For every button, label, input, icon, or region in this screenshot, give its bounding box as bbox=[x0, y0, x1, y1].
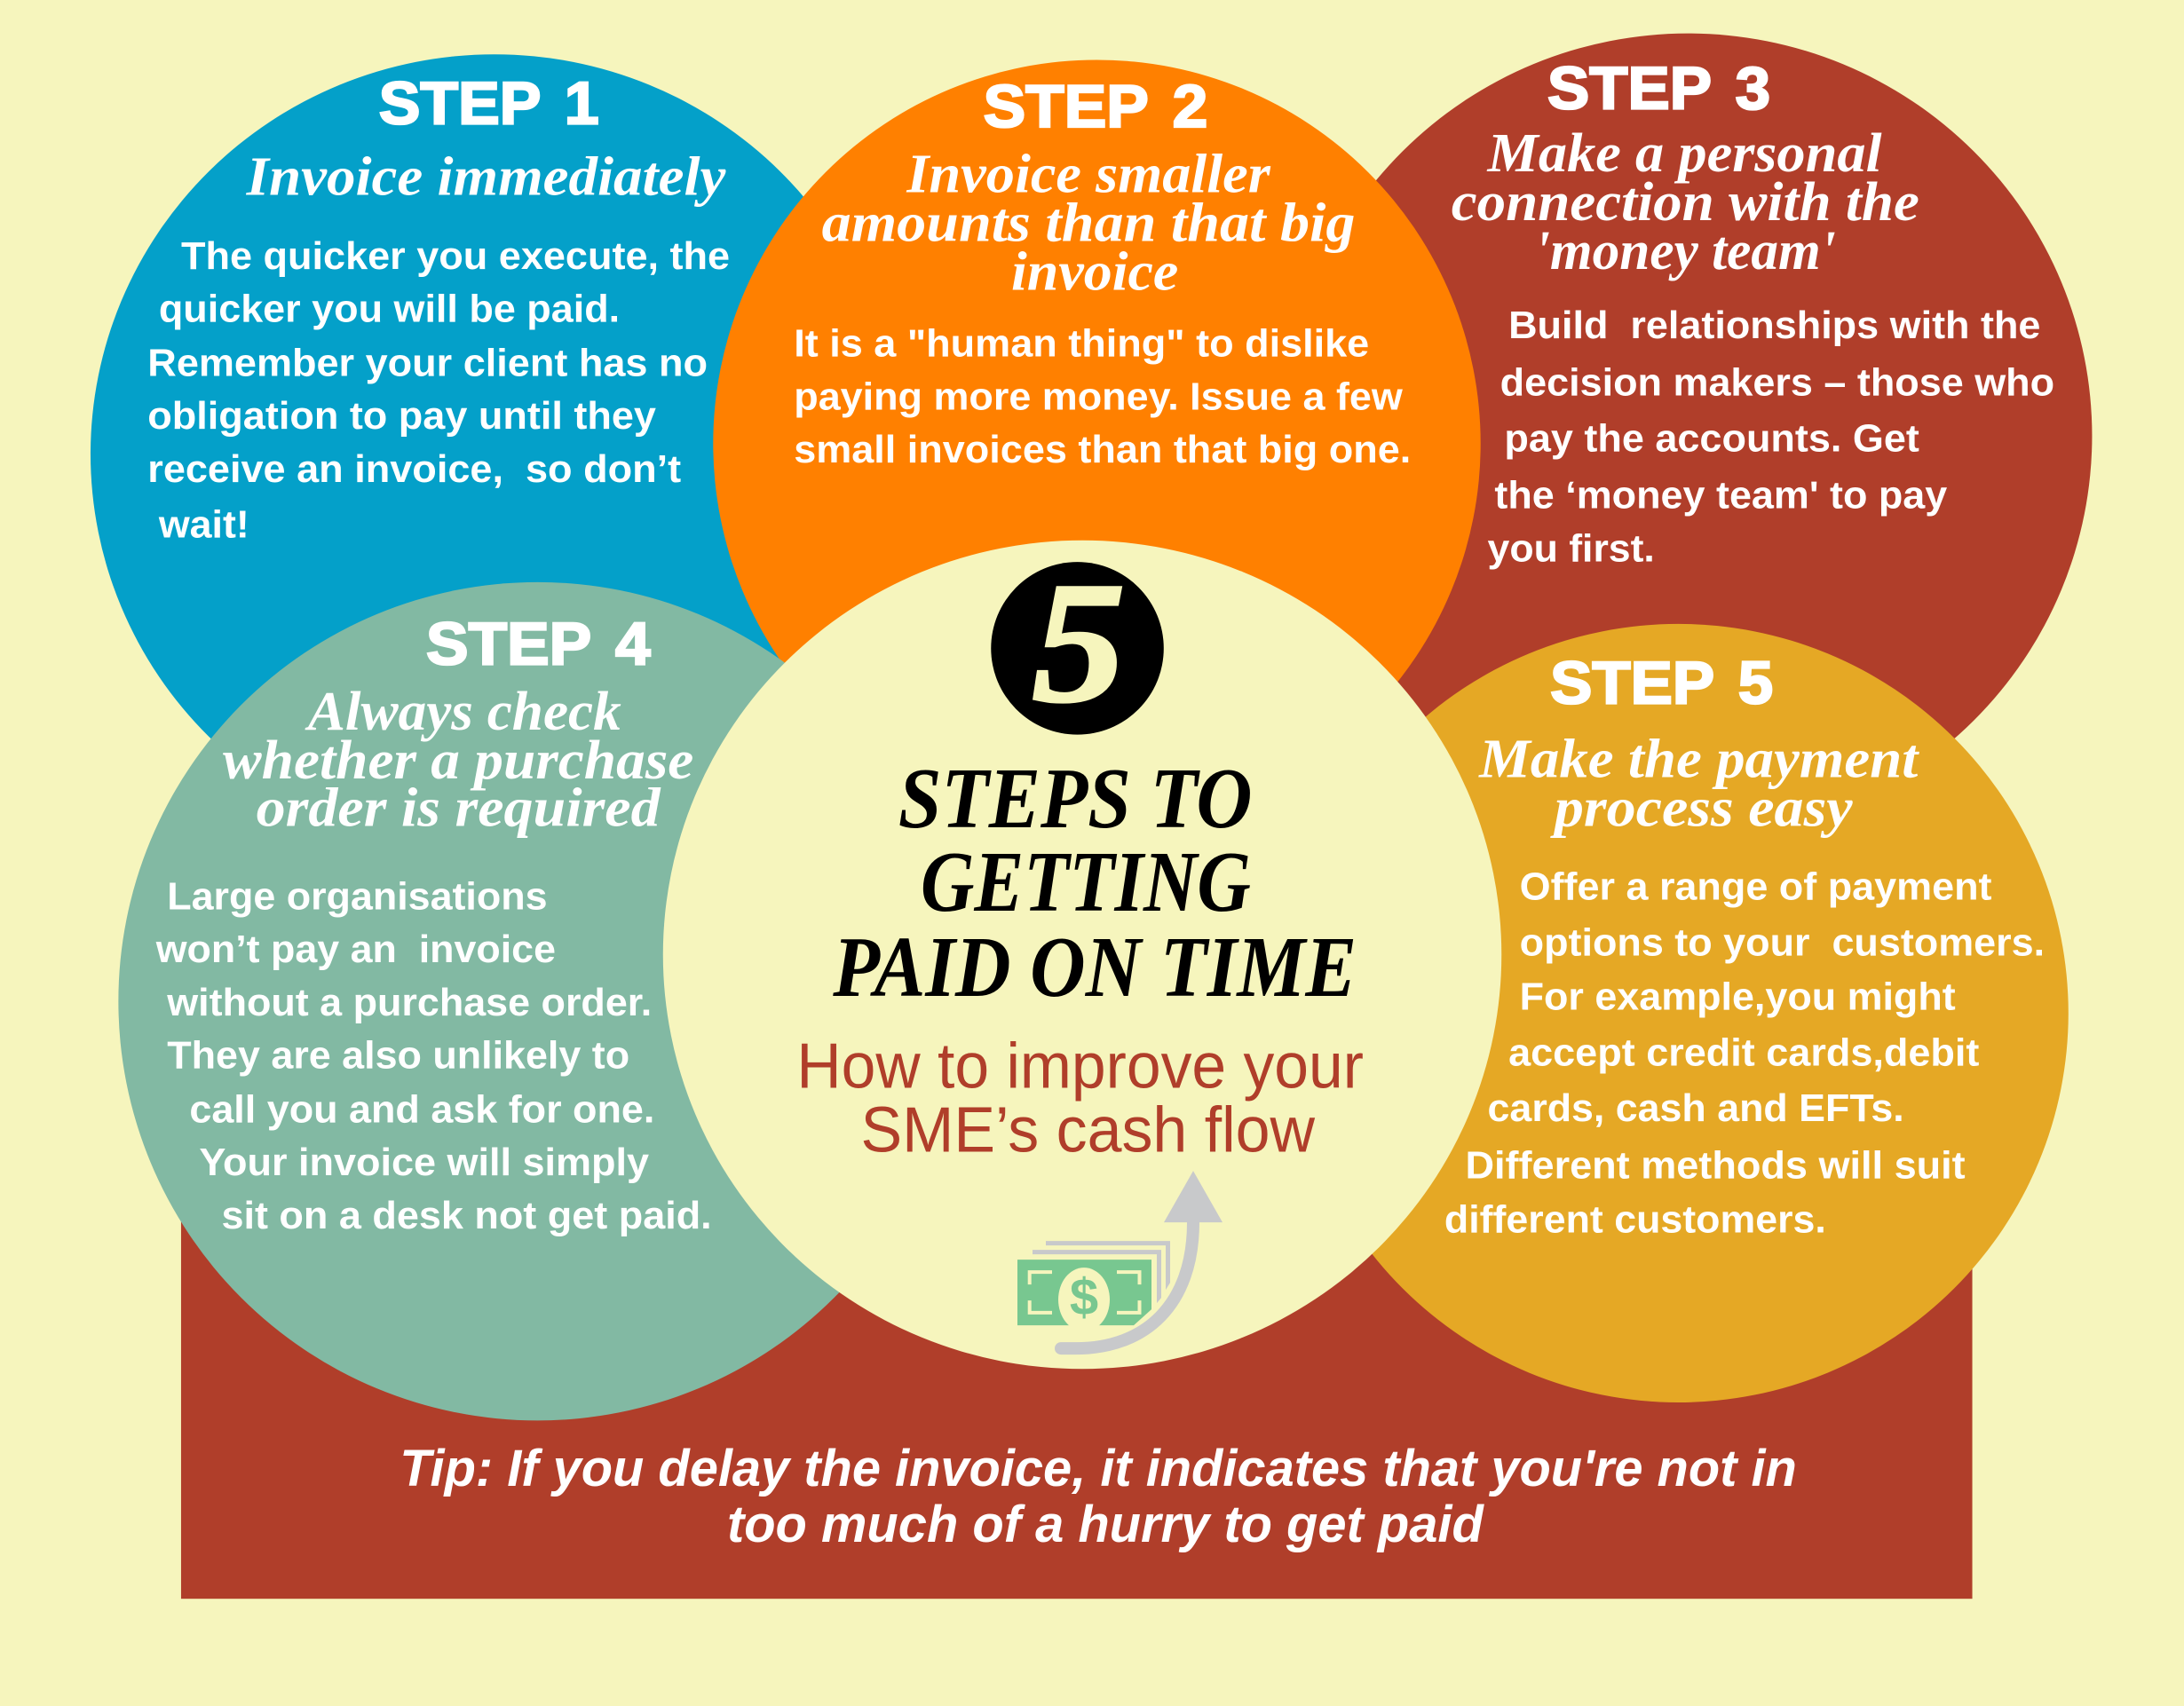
step 2 label: STEP 2 bbox=[984, 74, 1207, 140]
step 3 heading bbox=[1452, 122, 1919, 281]
icon: money with rising arrow bbox=[1017, 1171, 1223, 1348]
icon: money with rising arrow: $ bbox=[1070, 1268, 1098, 1326]
step 5 body: options to your customers. bbox=[1520, 920, 2045, 964]
step 4 heading: whether a purchase bbox=[223, 729, 693, 791]
step 5 body bbox=[1444, 865, 2045, 1242]
main title: GETTING bbox=[921, 834, 1251, 930]
step 1 body: wait! bbox=[158, 503, 249, 547]
step 3 body: the ‘money team' to pay bbox=[1494, 474, 1948, 517]
step 3 body: you first. bbox=[1488, 526, 1655, 570]
step 4 body: Your invoice will simply bbox=[199, 1141, 650, 1184]
banner: bottom tip panel bbox=[181, 1170, 1973, 1599]
circle: step 1 background bbox=[91, 54, 898, 854]
tip text bbox=[400, 1440, 1797, 1553]
step 2 body: small invoices than that big one. bbox=[794, 428, 1411, 471]
step 3 heading: Make a personal bbox=[1487, 122, 1882, 184]
step 5 body: Offer a range of payment bbox=[1520, 865, 1992, 909]
step 4 label: STEP 4 bbox=[426, 611, 651, 677]
step 5 heading: Make the payment bbox=[1478, 727, 1919, 789]
step 1 body: The quicker you execute, the bbox=[181, 234, 730, 278]
step 2 body: paying more money. Issue a few bbox=[794, 375, 1404, 418]
step 2 heading: amounts than that big bbox=[822, 191, 1356, 253]
step 4 body: sit on a desk not get paid. bbox=[221, 1194, 712, 1237]
circle: step 3 background bbox=[1285, 34, 2092, 839]
main title: STEPS TO bbox=[898, 751, 1252, 847]
circle: step 2 background bbox=[713, 59, 1481, 827]
step 4 body: Large organisations bbox=[167, 875, 548, 919]
subtitle: SME’s cash flow bbox=[861, 1095, 1316, 1166]
step 2 heading bbox=[822, 143, 1356, 302]
circle: step 4 background bbox=[118, 582, 957, 1420]
subtitle: How to improve your bbox=[796, 1031, 1364, 1102]
step 5 body: Different methods will suit bbox=[1465, 1143, 1966, 1187]
step 4 body: call you and ask for one. bbox=[189, 1088, 654, 1132]
step 4 body: won’t pay an invoice bbox=[155, 928, 556, 971]
main title: PAID ON TIME bbox=[832, 920, 1357, 1015]
step 3 body: decision makers – those who bbox=[1500, 361, 2054, 405]
subtitle bbox=[796, 1031, 1364, 1166]
step 1 body: obligation to pay until they bbox=[147, 394, 657, 438]
step 1 body: Remember your client has no bbox=[147, 342, 708, 385]
step 2 heading: Invoice smaller bbox=[906, 143, 1270, 205]
step 5 body: different customers. bbox=[1444, 1198, 1826, 1242]
step 4 body bbox=[155, 875, 712, 1237]
panel: centre title bbox=[796, 548, 1364, 1348]
tip text: Tip: If you delay the invoice, it indicates that you're not in bbox=[400, 1440, 1797, 1497]
step 1 body: receive an invoice, so don’t bbox=[147, 447, 682, 491]
step 5 body: cards, cash and EFTs. bbox=[1488, 1086, 1904, 1130]
step 3 label: STEP 3 bbox=[1547, 55, 1770, 122]
step 4 heading: Always check bbox=[305, 680, 621, 742]
panel: step 2 text bbox=[794, 74, 1411, 471]
panel: step 4 text bbox=[155, 611, 712, 1237]
main title bbox=[832, 751, 1357, 1015]
step 3 body bbox=[1488, 304, 2054, 570]
circle: step 5 background bbox=[1288, 624, 2069, 1402]
step 5 label: STEP 5 bbox=[1550, 650, 1773, 716]
panel: step 3 text bbox=[1452, 55, 2054, 570]
panel: step 1 text bbox=[147, 71, 730, 547]
step 1 body: quicker you will be paid. bbox=[159, 287, 620, 330]
icon: number 5 badge bbox=[991, 548, 1164, 738]
step 4 body: without a purchase order. bbox=[166, 981, 652, 1024]
icon: number 5 badge: 5 bbox=[1033, 548, 1126, 738]
step 5 heading: process easy bbox=[1550, 776, 1854, 838]
circle: centre title background bbox=[663, 541, 1501, 1369]
step 1 heading: Invoice immediately bbox=[246, 146, 727, 208]
step 4 heading bbox=[223, 680, 693, 838]
step 3 heading: 'money team' bbox=[1535, 219, 1836, 281]
step 1 label: STEP 1 bbox=[379, 71, 599, 138]
step 5 body: accept credit cards,debit bbox=[1508, 1031, 1980, 1074]
step 1 body bbox=[147, 234, 730, 547]
panel: step 5 text bbox=[1444, 650, 2045, 1242]
step 2 body: It is a "human thing" to dislike bbox=[794, 322, 1369, 366]
step 3 body: pay the accounts. Get bbox=[1504, 416, 1919, 460]
step 5 body: For example,you might bbox=[1520, 975, 1956, 1019]
step 3 body: Build relationships with the bbox=[1508, 304, 2040, 347]
step 3 heading: connection with the bbox=[1452, 170, 1919, 233]
step 4 body: They are also unlikely to bbox=[167, 1033, 629, 1077]
step 2 heading: invoice bbox=[1011, 240, 1178, 302]
step 5 heading bbox=[1478, 727, 1919, 838]
tip text: too much of a hurry to get paid bbox=[727, 1496, 1484, 1553]
step 2 body bbox=[794, 322, 1411, 471]
step 4 heading: order is required bbox=[257, 776, 661, 838]
